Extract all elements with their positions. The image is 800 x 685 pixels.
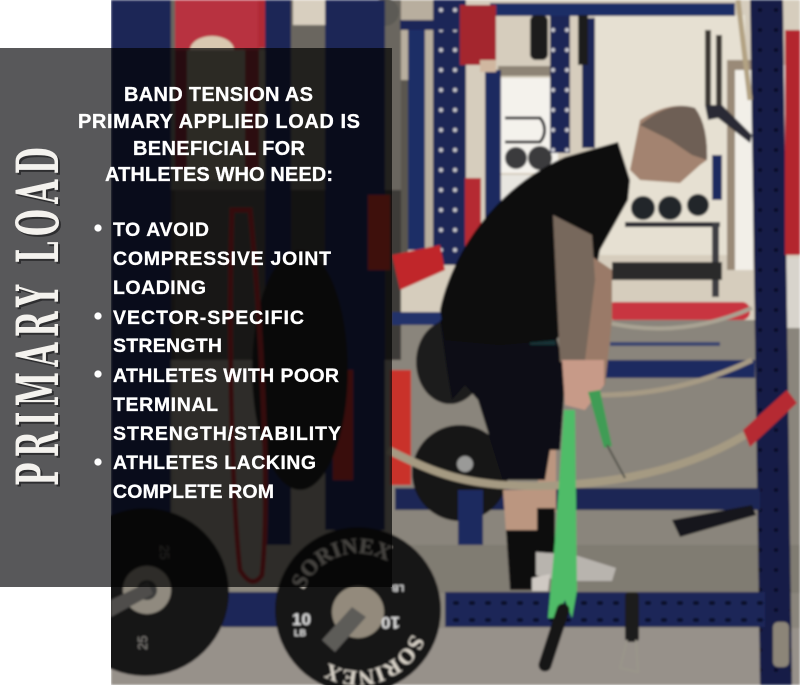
bullet: athletes lacking complete rom: ATHLETES LACKING: [113, 452, 316, 474]
grey title panel: [0, 48, 111, 587]
bullet: vector-specific strength: STRENGTH: [113, 335, 222, 357]
hanging bar end: [545, 610, 563, 665]
green resistance band: [548, 390, 625, 618]
head: [630, 106, 707, 183]
floor: [170, 318, 800, 630]
heading text: PRIMARY APPLIED LOAD IS: [78, 111, 360, 133]
weight plate 10 lb Sorinex: SORINEX: [291, 537, 394, 590]
upper tension band: [600, 360, 752, 395]
red band clamp: [743, 390, 797, 447]
bullet: athletes with poor terminal strength/stability: ATHLETES WITH POOR: [113, 365, 339, 387]
red rack parts: [333, 5, 800, 485]
weight plate 25: 25: [157, 545, 172, 559]
weight plate 10 lb Sorinex: LB: [392, 583, 404, 593]
background dumbbells and storage rack: [505, 0, 752, 297]
red resistance band on rack: [230, 210, 265, 581]
shorts: [440, 300, 566, 480]
bullet: athletes with poor terminal strength/stability: [94, 365, 341, 445]
shoes: [536, 552, 616, 581]
semi-transparent dark text panel: [111, 48, 392, 587]
bullet: athletes lacking complete rom: COMPLETE ROM: [113, 481, 274, 503]
main tension band: [388, 435, 745, 486]
heading text: [78, 84, 360, 186]
heading text: BENEFICIAL FOR: [133, 138, 306, 160]
lower right bench leg: [672, 505, 756, 537]
upper left equipment: [168, 0, 402, 361]
athlete: [440, 106, 707, 591]
weight plate 10 lb Sorinex: 10: [381, 613, 400, 632]
horizontal beams: [222, 3, 765, 627]
shorts teal tint: [528, 338, 556, 346]
weight plate 10 lb Sorinex: 10: [292, 610, 311, 629]
wall: [399, 0, 800, 321]
bullet: athletes lacking complete rom: [94, 452, 316, 503]
bullet: to avoid compressive joint loading: LOADING: [113, 277, 206, 299]
bullet: to avoid compressive joint loading: COMPRESSIVE JOINT: [113, 248, 331, 270]
weight plate 25: [111, 508, 230, 678]
right post bolts: [773, 622, 789, 667]
title: PRIMARY LOAD: [4, 142, 74, 488]
heading text: ATHLETES WHO NEED:: [105, 164, 333, 186]
shirt: [440, 142, 630, 345]
weight plate 10 lb Sorinex: LB: [294, 628, 306, 638]
rear arm: [585, 255, 612, 385]
bullet list: [94, 219, 341, 503]
bullet: to avoid compressive joint loading: [94, 219, 331, 299]
bright wall and windows: [396, 0, 800, 328]
socks: [506, 530, 537, 590]
legs: [503, 490, 543, 532]
bullet: to avoid compressive joint loading: TO AVOID: [113, 219, 209, 241]
hands: [562, 360, 604, 410]
bullet: athletes with poor terminal strength/stability: STRENGTH/STABILITY: [113, 423, 341, 445]
weight plate 10 lb Sorinex: [274, 528, 442, 685]
tattooed arm: [553, 215, 595, 362]
weight plate 25: 25: [135, 636, 150, 650]
bullet: athletes with poor terminal strength/stability: TERMINAL: [113, 394, 218, 416]
bullet: vector-specific strength: [94, 307, 304, 357]
hanging handle: [624, 592, 640, 644]
heading text: BAND TENSION AS: [124, 84, 313, 106]
back plate: [252, 250, 508, 545]
bullet: vector-specific strength: VECTOR-SPECIFIC: [113, 307, 304, 329]
